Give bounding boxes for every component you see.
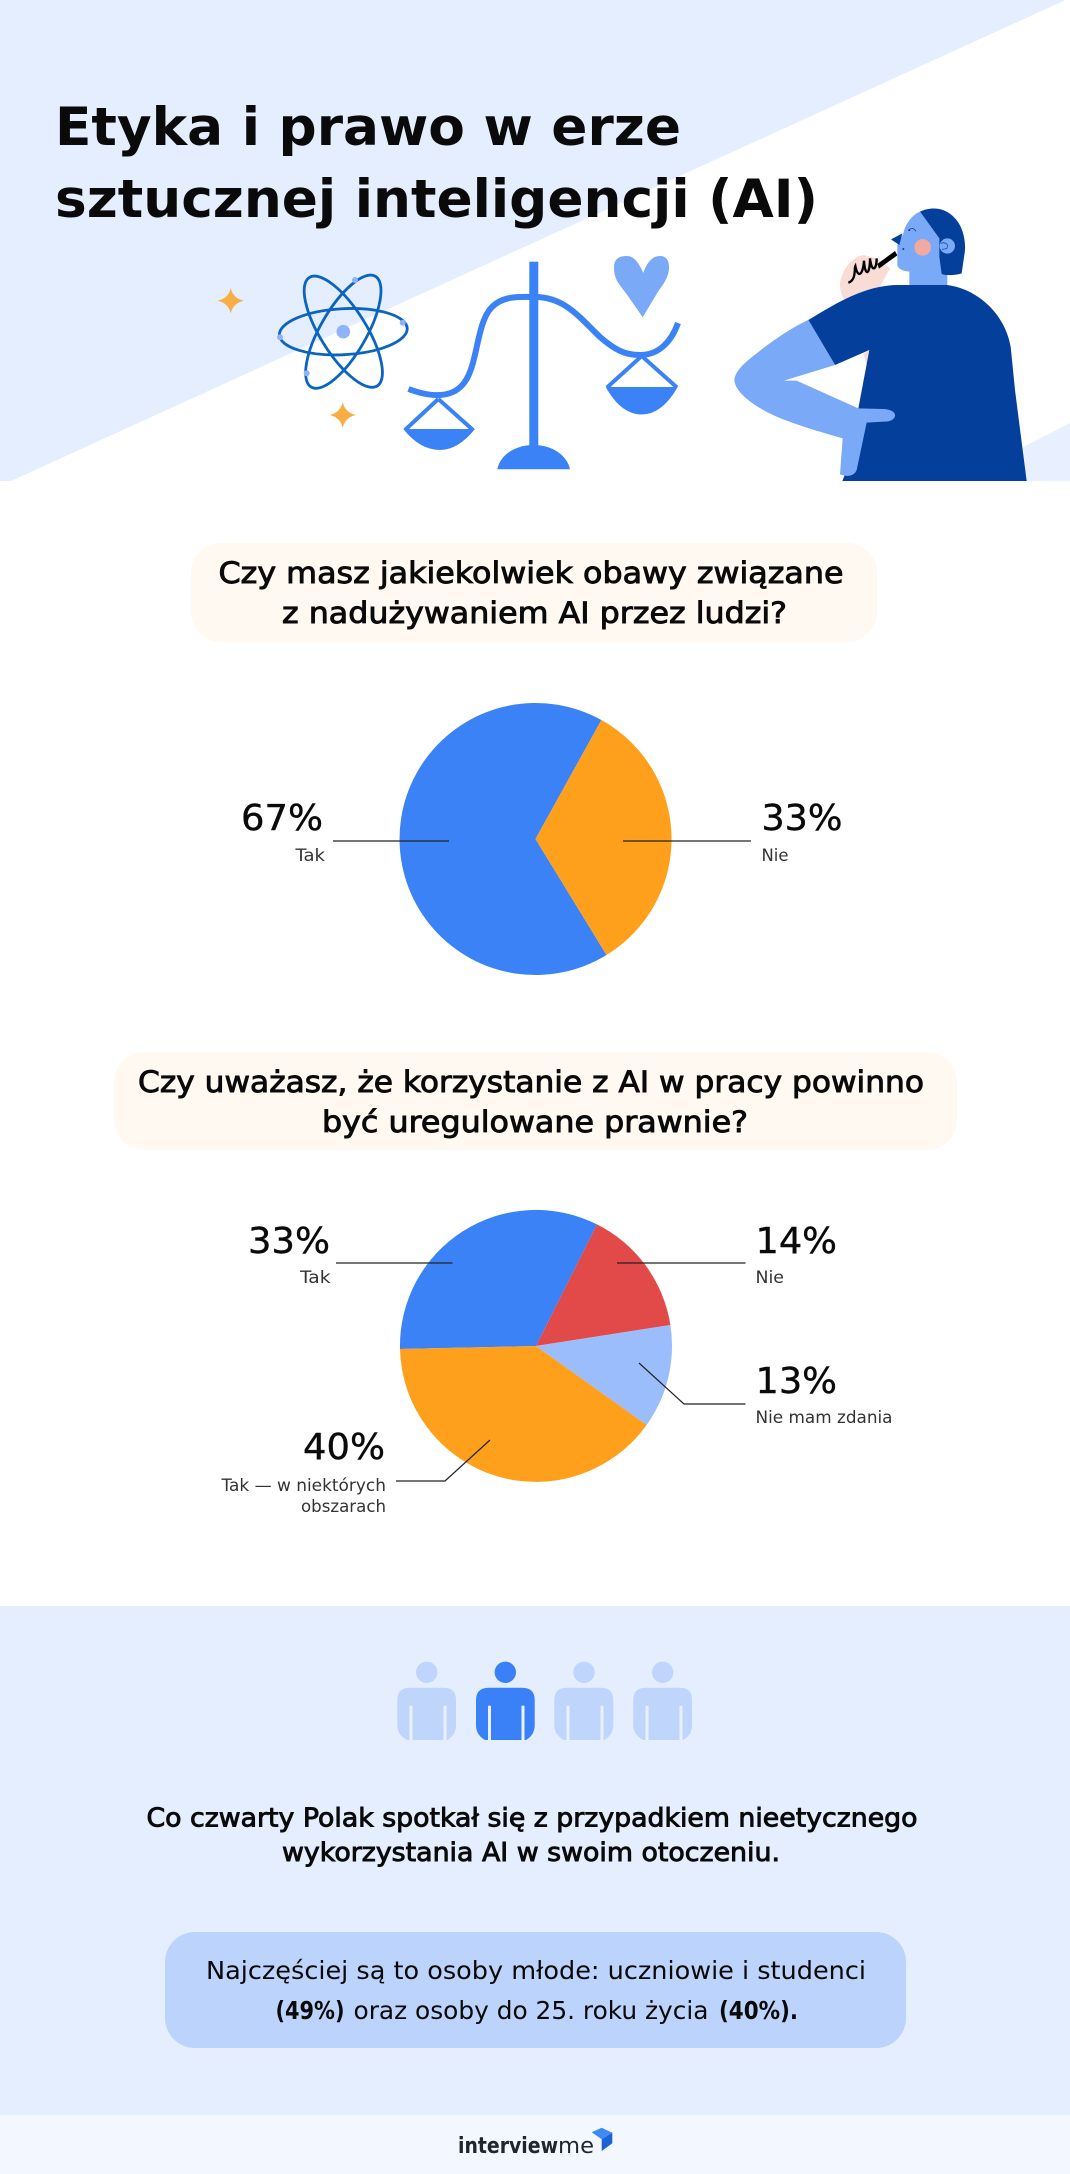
label: 67% Tak: 67% — [241, 798, 323, 839]
text: one in four Poles statement: wykorzystania AI w swoim otoczeniu. — [282, 1838, 780, 1868]
callout: young people: Najczęściej są to osoby młode: uczniowie i studenci — [206, 1956, 866, 1985]
label: 13% Nie mam zdania: 13% — [756, 1361, 837, 1402]
icon: atom — [277, 265, 408, 399]
icon: scales — [403, 262, 678, 469]
label: 33% Nie: 33% — [762, 798, 842, 839]
label: 33% Tak — [248, 1221, 331, 1288]
logo: interviewme: interview — [458, 2134, 558, 2159]
panel: question two heading: Czy uważasz, że korzystanie z AI w pracy powinno — [138, 1065, 924, 1099]
icon: sparkle left — [218, 288, 244, 314]
logo: interviewme: me — [558, 2134, 594, 2159]
pie chart: question one — [333, 703, 751, 975]
icon: sparkle bottom — [330, 402, 356, 428]
text: one in four Poles statement — [146, 1804, 918, 1868]
label: 13% Nie mam zdania — [756, 1361, 892, 1428]
logo: interviewme — [458, 2128, 612, 2159]
panel: question one heading — [191, 543, 877, 642]
panel: question one heading: Czy masz jakiekolwiek obawy związane — [218, 556, 844, 590]
label: 14% Nie: Nie — [756, 1268, 784, 1288]
panel: question two heading — [114, 1052, 957, 1150]
header background — [0, 0, 1070, 481]
title: sztucznej inteligencji (AI) — [55, 169, 818, 230]
label: 40% Tak w niektórych obszarach: Tak — w niektórych — [221, 1476, 386, 1496]
label: 40% Tak w niektórych obszarach: obszarach — [301, 1497, 386, 1517]
label: 33% Tak: Tak — [299, 1268, 331, 1288]
label: 14% Nie: 14% — [756, 1221, 837, 1262]
panel: question two heading: być uregulowane prawnie? — [322, 1105, 748, 1139]
title: Etyka i prawo w erze — [55, 97, 681, 158]
panel: footer band — [0, 2115, 1070, 2174]
text: one in four Poles statement: Co czwarty Polak spotkał się z przypadkiem nieetycznego — [146, 1804, 918, 1834]
title — [55, 97, 818, 230]
label: 40% Tak w niektórych obszarach — [221, 1427, 386, 1517]
label: 67% Tak — [241, 798, 325, 866]
label: 67% Tak: Tak — [294, 846, 325, 866]
callout: young people: (49%) — [276, 1996, 344, 2025]
icon: heart — [614, 256, 669, 317]
label: 33% Nie — [762, 798, 842, 866]
callout: young people — [165, 1932, 906, 2048]
label: 33% Tak: 33% — [248, 1221, 330, 1262]
label: 40% Tak w niektórych obszarach: 40% — [303, 1427, 385, 1468]
label: 33% Nie: Nie — [762, 846, 788, 866]
callout: young people: oraz osoby do 25. roku życia — [354, 1996, 708, 2025]
callout: young people: (40%). — [719, 1996, 798, 2025]
label: 13% Nie mam zdania: Nie mam zdania — [756, 1408, 892, 1428]
illustration: thinking person — [734, 208, 1027, 481]
icon: four people, one highlighted — [397, 1662, 692, 1740]
pie chart: question two — [336, 1210, 746, 1482]
label: 14% Nie — [756, 1221, 837, 1288]
panel: bottom section background — [0, 1606, 1070, 2115]
panel: question one heading: z nadużywaniem AI przez ludzi? — [282, 596, 787, 630]
